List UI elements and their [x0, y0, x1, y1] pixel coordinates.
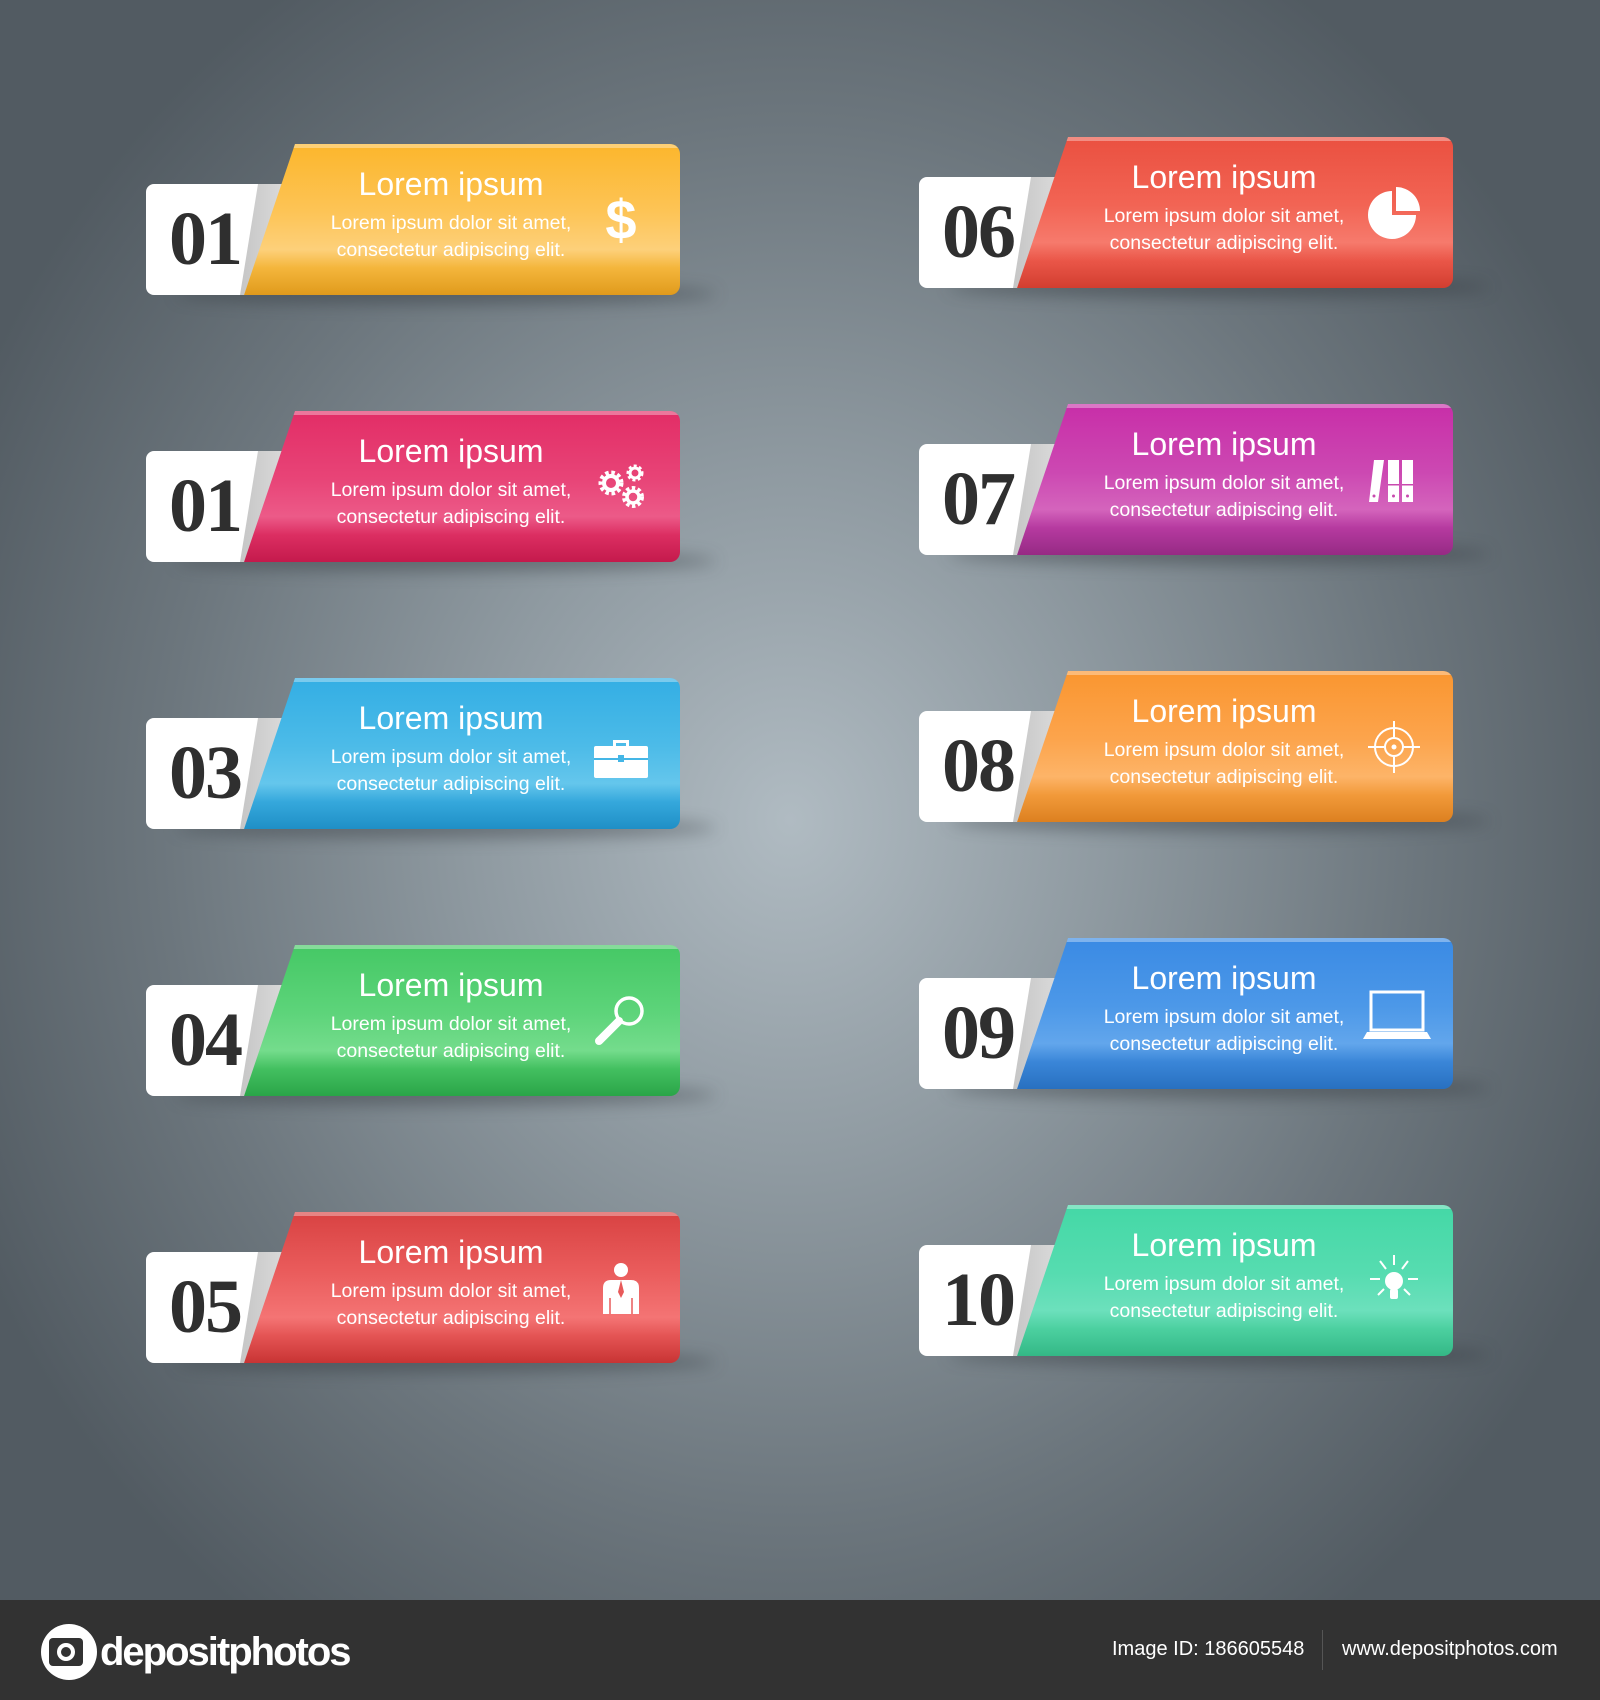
- card 07: Lorem ipsum dolor sit amet,: [1104, 472, 1344, 494]
- card 09: consectetur adipiscing elit.: [1110, 1033, 1338, 1055]
- card 10: Lorem ipsum dolor sit amet,: [1104, 1273, 1344, 1295]
- icon: dollar: $: [605, 188, 637, 251]
- card 05: Lorem ipsum dolor sit amet,: [331, 1280, 571, 1302]
- card 01: Lorem ipsum dolor sit amet,: [331, 212, 571, 234]
- number box: [146, 451, 266, 562]
- card 06: Lorem ipsum: [1132, 159, 1316, 195]
- card 02: Lorem ipsum dolor sit amet,: [331, 479, 571, 501]
- card 09: Lorem ipsum dolor sit amet,: [1104, 1006, 1344, 1028]
- card 03: Lorem ipsum dolor sit amet,: [331, 746, 571, 768]
- card 03: consectetur adipiscing elit.: [337, 773, 565, 795]
- card 05: Lorem ipsum: [359, 1234, 543, 1270]
- card 10: consectetur adipiscing elit.: [1110, 1300, 1338, 1322]
- card 10: 10: [942, 1258, 1014, 1342]
- number box: [919, 711, 1039, 822]
- number box: [146, 1252, 266, 1363]
- icon: magnifier: [595, 996, 644, 1045]
- number box: [919, 1245, 1039, 1356]
- card 07: [919, 404, 1474, 570]
- number box: [146, 184, 266, 295]
- card 02: consectetur adipiscing elit.: [337, 506, 565, 528]
- card 04: [146, 945, 711, 1112]
- card 04: consectetur adipiscing elit.: [337, 1040, 565, 1062]
- logo: [41, 1624, 350, 1680]
- colored band: [244, 144, 680, 295]
- icon: target: [1368, 721, 1420, 773]
- card 01: 01: [169, 197, 241, 281]
- icon: light bulb: [1370, 1255, 1418, 1299]
- card 06: consectetur adipiscing elit.: [1110, 232, 1338, 254]
- card 05: 05: [169, 1265, 241, 1349]
- icon: binders: [1369, 460, 1413, 502]
- card 07: Lorem ipsum: [1132, 426, 1316, 462]
- number box: [919, 177, 1039, 288]
- card 02: 01: [169, 464, 241, 548]
- card 09: 09: [942, 991, 1014, 1075]
- colored band: [1017, 1205, 1453, 1356]
- card 10: [919, 1205, 1469, 1370]
- card 06: Lorem ipsum dolor sit amet,: [1104, 205, 1344, 227]
- footer bar: [0, 1600, 1600, 1700]
- card 05: consectetur adipiscing elit.: [337, 1307, 565, 1329]
- number box: [146, 985, 266, 1096]
- card 10: Lorem ipsum: [1132, 1227, 1316, 1263]
- card 06: [919, 137, 1469, 302]
- card 01: [146, 144, 708, 310]
- card 07: consectetur adipiscing elit.: [1110, 499, 1338, 521]
- card 09: [919, 938, 1474, 1104]
- card 08: Lorem ipsum: [1132, 693, 1316, 729]
- card 05: [146, 1212, 708, 1378]
- card 01: consectetur adipiscing elit.: [337, 239, 565, 261]
- image id: Image ID: 186605548: [1112, 1638, 1304, 1660]
- card 08: [919, 671, 1476, 838]
- card 03: 03: [169, 731, 241, 815]
- icon: person: [603, 1263, 639, 1314]
- number box: [919, 444, 1039, 555]
- colored band: [244, 678, 680, 829]
- colored band: [1017, 404, 1453, 555]
- card 04: Lorem ipsum dolor sit amet,: [331, 1013, 571, 1035]
- website: www.depositphotos.com: [1342, 1638, 1558, 1660]
- icon: laptop: [1363, 990, 1431, 1039]
- card 03: [146, 678, 712, 846]
- card 01: Lorem ipsum: [359, 166, 543, 202]
- number box: [919, 978, 1039, 1089]
- icon: pie chart: [1368, 187, 1420, 239]
- icon: briefcase: [594, 740, 648, 778]
- logo: depositphotos: [100, 1630, 350, 1674]
- card 08: 08: [942, 724, 1014, 808]
- card 02: Lorem ipsum: [359, 433, 543, 469]
- colored band: [244, 411, 680, 562]
- number box: [146, 718, 266, 829]
- card 09: Lorem ipsum: [1132, 960, 1316, 996]
- colored band: [1017, 137, 1453, 288]
- colored band: [244, 1212, 680, 1363]
- card 02: [146, 411, 711, 578]
- card 08: consectetur adipiscing elit.: [1110, 766, 1338, 788]
- card 04: Lorem ipsum: [359, 967, 543, 1003]
- card 07: 07: [942, 457, 1014, 541]
- colored band: [1017, 671, 1453, 822]
- card 03: Lorem ipsum: [359, 700, 543, 736]
- card 08: Lorem ipsum dolor sit amet,: [1104, 739, 1344, 761]
- icon: gears: [598, 464, 644, 508]
- colored band: [244, 945, 680, 1096]
- card 04: 04: [169, 998, 241, 1082]
- card 06: 06: [942, 190, 1014, 274]
- colored band: [1017, 938, 1453, 1089]
